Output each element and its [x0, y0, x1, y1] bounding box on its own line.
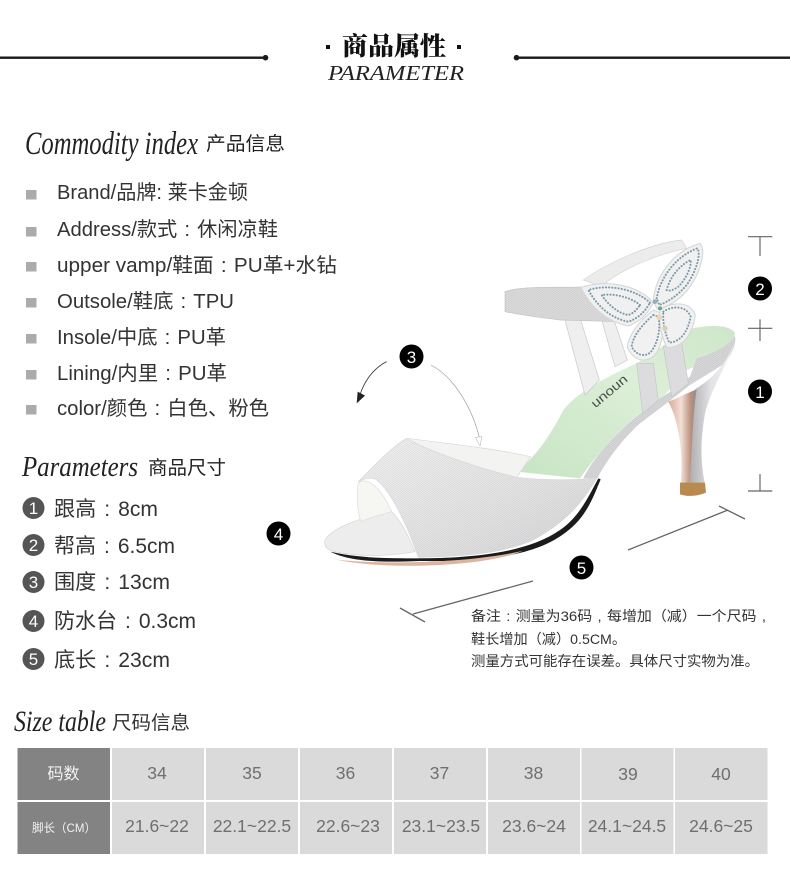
- marker 3: 3: [407, 348, 416, 367]
- list text: [57, 181, 337, 420]
- marker 3: [400, 344, 424, 368]
- parameter values: 底长 : 23cm: [54, 649, 170, 672]
- section heading: size table: 尺码信息: [112, 712, 190, 734]
- size row: 38: [524, 763, 543, 783]
- list text: Address/款式 : 休闲凉鞋: [57, 218, 278, 241]
- row labels: 码数: [47, 765, 80, 783]
- sole edge: [330, 478, 601, 562]
- section heading: size table: Size table: [14, 705, 106, 738]
- panel: size parameters list: [22, 497, 196, 672]
- toe platform: [325, 512, 415, 555]
- measure bracket: heel: [748, 237, 772, 491]
- parameter values: 帮高 : 6.5cm: [54, 535, 175, 558]
- circumference arrow right: [431, 365, 482, 446]
- list text: Lining/内里 : PU革: [57, 362, 227, 385]
- heel tip: [680, 483, 706, 496]
- logo on insole: unoun: [588, 372, 630, 411]
- marker 2: 2: [755, 280, 765, 299]
- foot length row: 23.6~24: [502, 816, 566, 836]
- heading: 商品属性: 商品属性: [342, 27, 446, 63]
- title: product attributes header: [0, 27, 790, 85]
- foot length row: [125, 816, 753, 836]
- list text: upper vamp/鞋面 : PU革+水钻: [57, 254, 337, 277]
- size table: [18, 748, 768, 854]
- note text: 测量方式可能存在误差。具体尺寸实物为准。: [471, 653, 759, 669]
- size row: 40: [711, 764, 731, 784]
- panel: product info list: [26, 181, 337, 420]
- marker 1: 1: [755, 383, 765, 402]
- foot length row: 24.1~24.5: [588, 816, 666, 836]
- size row: 36: [336, 763, 355, 783]
- vamp: [358, 438, 597, 557]
- header rule right: [514, 55, 790, 60]
- length measure line right: [628, 506, 745, 550]
- number badges: 1: [29, 499, 38, 518]
- note text: 鞋长增加（减）0.5CM。: [471, 631, 626, 647]
- marker 5: [570, 556, 594, 580]
- ankle strap: [505, 287, 620, 322]
- number badges: 5: [29, 650, 38, 669]
- parameter values: 防水台 : 0.3cm: [54, 610, 196, 633]
- number badges: 2: [29, 536, 38, 555]
- foot length row: 21.6~22: [125, 816, 189, 836]
- rhinestones: [657, 248, 699, 305]
- list text: Outsole/鞋底 : TPU: [57, 290, 234, 313]
- size row: [147, 763, 731, 784]
- parameter values: [54, 498, 196, 672]
- number badges: [22, 497, 44, 670]
- back elastic strap: [583, 240, 687, 287]
- table data cells: [112, 748, 768, 854]
- list text: color/颜色 : 白色、粉色: [57, 397, 269, 420]
- header rule left: [0, 55, 268, 60]
- section heading: parameters: [21, 451, 226, 483]
- marker 1: [748, 380, 772, 404]
- marker 5: 5: [577, 559, 586, 578]
- length measure line left: [400, 581, 533, 622]
- vamp lining: [407, 438, 531, 477]
- section heading: size table: [14, 705, 190, 738]
- size row: 37: [430, 763, 449, 783]
- circumference arrow left: [357, 362, 387, 403]
- illustration: butterfly sandal: [325, 237, 772, 566]
- section heading: commodity index: Commodity index: [25, 126, 198, 162]
- stiletto heel: [668, 343, 734, 484]
- foot length row: 22.6~23: [316, 816, 380, 836]
- section heading: parameters: 商品尺寸: [148, 457, 226, 479]
- marker 4: [266, 522, 290, 546]
- toe opening: [357, 481, 392, 522]
- section heading: commodity index: 产品信息: [206, 133, 285, 155]
- list text: Brand/品牌: 莱卡金顿: [57, 181, 248, 204]
- subheading: PARAMETER: PARAMETER: [327, 61, 464, 85]
- table header cells: [18, 748, 110, 854]
- insole: [517, 326, 735, 478]
- note text: 备注 : 测量为36码 , 每增加（减）一个尺码 ,: [471, 608, 766, 624]
- foot length row: 24.6~25: [689, 816, 753, 836]
- number badges: 3: [29, 573, 38, 592]
- foot length row: 23.1~23.5: [402, 816, 480, 836]
- list text: Insole/中底 : PU革: [57, 326, 226, 349]
- size row: 34: [147, 763, 167, 783]
- number badges: 4: [29, 612, 38, 631]
- size row: 39: [618, 764, 638, 784]
- foot length row: 22.1~22.5: [213, 816, 291, 836]
- parameter values: 围度 : 13cm: [54, 571, 170, 594]
- marker 2: [748, 276, 772, 300]
- section heading: parameters: Parameters: [21, 451, 138, 483]
- list bullets: [26, 190, 36, 414]
- parameter values: 跟高 : 8cm: [54, 498, 158, 521]
- vertical straps: [637, 363, 658, 413]
- size row: 35: [242, 763, 262, 783]
- side straps: [565, 320, 599, 395]
- pearl centre: [656, 314, 662, 320]
- marker 4: 4: [274, 525, 283, 544]
- note text: [471, 608, 766, 669]
- side wall and heel counter: [583, 336, 735, 478]
- row labels: 脚长（CM）: [32, 820, 96, 835]
- butterfly ornament: [581, 243, 703, 360]
- row labels: [32, 765, 96, 835]
